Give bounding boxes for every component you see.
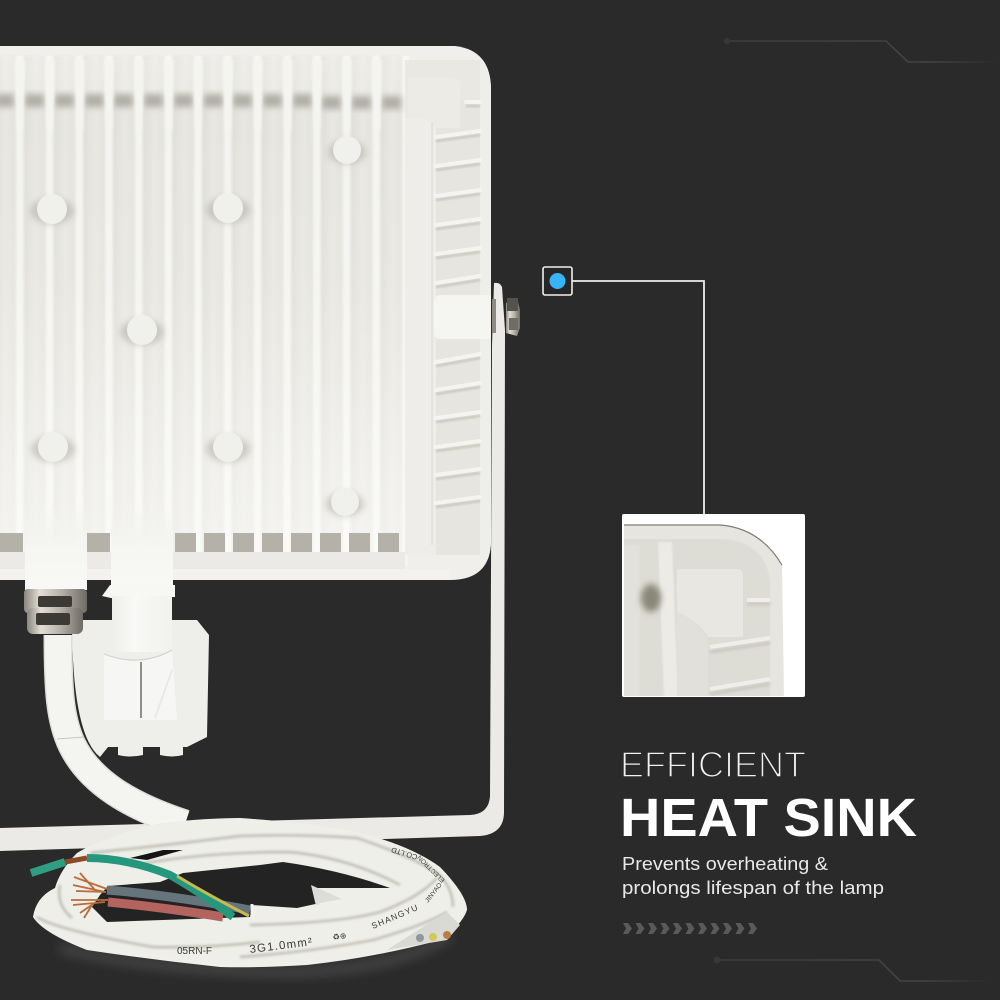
mounting post [434,295,480,339]
cable printing [177,845,446,957]
cable sticker [387,912,460,950]
side cooling fins [436,106,480,507]
decorative circuit line bottom [714,956,992,981]
glow below cable [60,935,450,972]
cable printing: 3G1.0mm² [249,936,314,956]
ribbed heat sink panel [0,56,410,566]
motion sensor housing [72,596,209,757]
metal cable gland [24,589,87,634]
chevron row [623,923,757,934]
callout connector line [572,281,704,514]
heat sink bosses [30,136,366,516]
inset shadow patch [641,584,661,612]
cable printing: ♻⊕ [332,931,347,942]
bare copper [65,858,87,862]
grey wire [107,890,250,910]
heading: HEAT SINK: HEAT SINK [620,788,917,848]
inset detail photo [622,514,805,697]
description text: Prevents overheating & [622,854,828,874]
heading: EFFICIENT: EFFICIENT [620,744,806,785]
lamp housing back [0,46,494,580]
coil silhouette [33,818,467,967]
corner block and side strip [405,60,491,560]
cable printing: SHANGYU [370,902,420,931]
cable printing: ELECTRON [416,853,446,884]
bolt [492,298,520,336]
red wire [108,902,223,917]
cable printing: JINYAO [424,882,444,904]
green wire [87,858,233,917]
coil shading lines [37,835,453,957]
mounting bracket [0,283,505,851]
bottom vent slots [0,533,399,552]
coiled cable [33,818,467,967]
coil openings [92,862,390,922]
cable and sensor collars [25,505,175,598]
cable printing: CO.LTD [390,845,419,862]
inset housing corner [624,525,784,697]
green wire tip [31,862,65,873]
description text: prolongs lifespan of the lamp [622,878,884,898]
description text [622,854,884,898]
power cable [57,635,185,824]
inset block [677,569,743,637]
wire sleeve end [250,904,254,918]
inset fins [710,604,770,694]
callout marker [543,267,572,295]
copper strands [71,873,108,918]
exposed wires [31,858,252,918]
floodlight product [0,46,520,967]
cable printing: 05RN-F [177,946,212,957]
tag inside coil [311,885,342,906]
decorative circuit line top [724,38,998,62]
